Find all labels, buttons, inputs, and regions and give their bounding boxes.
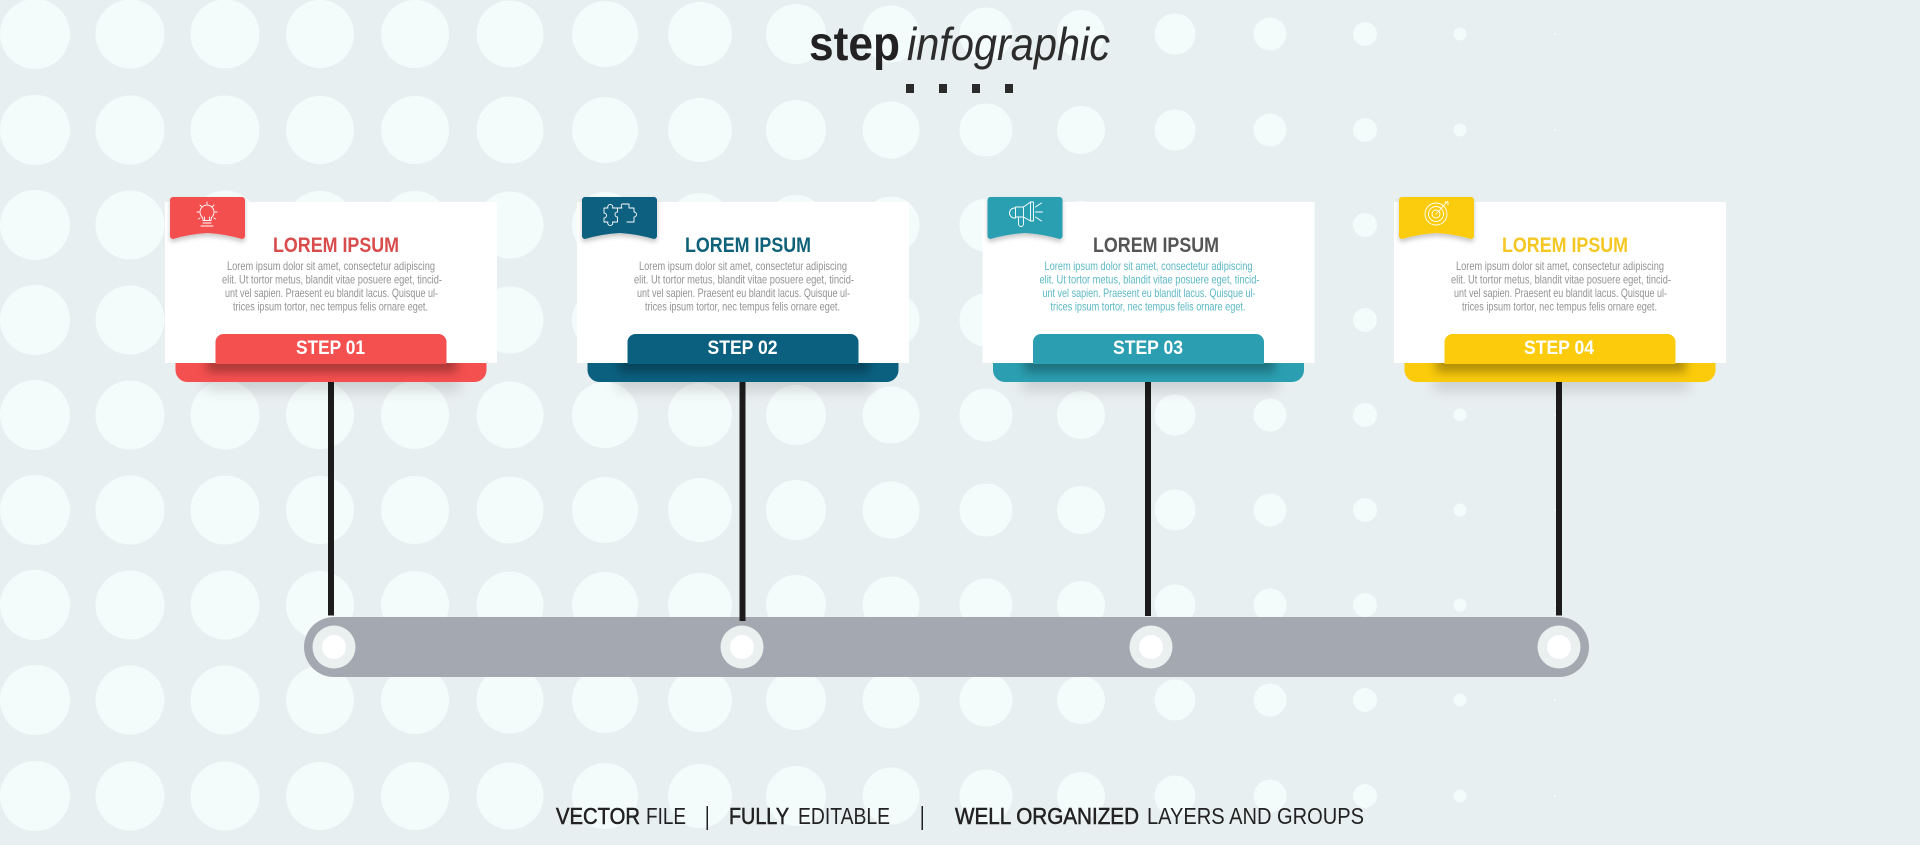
step label (628, 334, 858, 364)
title: infographic (907, 18, 1110, 70)
step label: STEP 02 (708, 338, 778, 359)
body text: elit. Ut tortor metus, blandit vitae posuere eget, tincid- (1040, 272, 1260, 286)
body text (1451, 259, 1671, 314)
node 2 (720, 626, 764, 668)
timeline bar (304, 617, 1589, 677)
heading: LOREM IPSUM (1093, 234, 1219, 257)
body text: trices ipsum tortor, nec tempus felis ornare eget. (1462, 300, 1657, 314)
heading: LOREM IPSUM (1502, 234, 1628, 257)
connector lines (328, 380, 1562, 621)
step label: STEP 04 (1524, 338, 1594, 359)
footer caption: FULLY (729, 803, 789, 829)
body text: unt vel sapien. Praesent eu blandit lacus. Quisque ul- (637, 286, 850, 300)
step label (216, 334, 446, 364)
body text: Lorem ipsum dolor sit amet, consectetur adipiscing (1456, 259, 1664, 273)
footer caption: VECTOR (556, 803, 640, 829)
body text: unt vel sapien. Praesent eu blandit lacus. Quisque ul- (225, 286, 438, 300)
heading: LOREM IPSUM (685, 234, 811, 257)
title decoration: four squares (906, 84, 1013, 93)
body text (222, 259, 442, 314)
body text: Lorem ipsum dolor sit amet, consectetur adipiscing (1044, 259, 1252, 273)
flag tab with bulb icon (170, 197, 245, 239)
footer caption (556, 803, 1364, 830)
footer caption: FILE (646, 803, 686, 829)
heading: LOREM IPSUM (273, 234, 399, 257)
footer caption: WELL ORGANIZED (955, 803, 1139, 829)
body text: Lorem ipsum dolor sit amet, consectetur adipiscing (639, 259, 847, 273)
panel: step 02 (577, 197, 909, 390)
body text: trices ipsum tortor, nec tempus felis ornare eget. (233, 300, 428, 314)
panel: step 04 (1394, 197, 1726, 390)
body text: elit. Ut tortor metus, blandit vitae posuere eget, tincid- (634, 272, 854, 286)
body text: Lorem ipsum dolor sit amet, consectetur adipiscing (227, 259, 435, 273)
body text: unt vel sapien. Praesent eu blandit lacus. Quisque ul- (1454, 286, 1667, 300)
body text (634, 259, 854, 314)
footer caption: EDITABLE (798, 803, 890, 829)
node 1 (312, 626, 356, 668)
node 3 (1130, 626, 1172, 668)
step label: STEP 01 (296, 338, 365, 359)
panel: step 03 (982, 197, 1314, 390)
node 4 (1538, 626, 1580, 668)
step label: STEP 03 (1113, 338, 1183, 359)
step label (1033, 334, 1264, 364)
panel: step 01 (165, 197, 497, 390)
title (809, 18, 1110, 71)
flag tab with target icon (1399, 197, 1474, 239)
body text: elit. Ut tortor metus, blandit vitae posuere eget, tincid- (1451, 272, 1671, 286)
flag tab with puzzle icon (582, 197, 657, 239)
footer caption: LAYERS AND GROUPS (1147, 803, 1364, 829)
body text (1040, 259, 1260, 314)
body text: elit. Ut tortor metus, blandit vitae posuere eget, tincid- (222, 272, 442, 286)
step label (1444, 334, 1676, 364)
body text: trices ipsum tortor, nec tempus felis ornare eget. (645, 300, 840, 314)
body text: trices ipsum tortor, nec tempus felis ornare eget. (1050, 300, 1246, 314)
flag tab with megaphone icon (988, 197, 1062, 239)
title: step (809, 18, 900, 71)
body text: unt vel sapien. Praesent eu blandit lacus. Quisque ul- (1042, 286, 1256, 300)
